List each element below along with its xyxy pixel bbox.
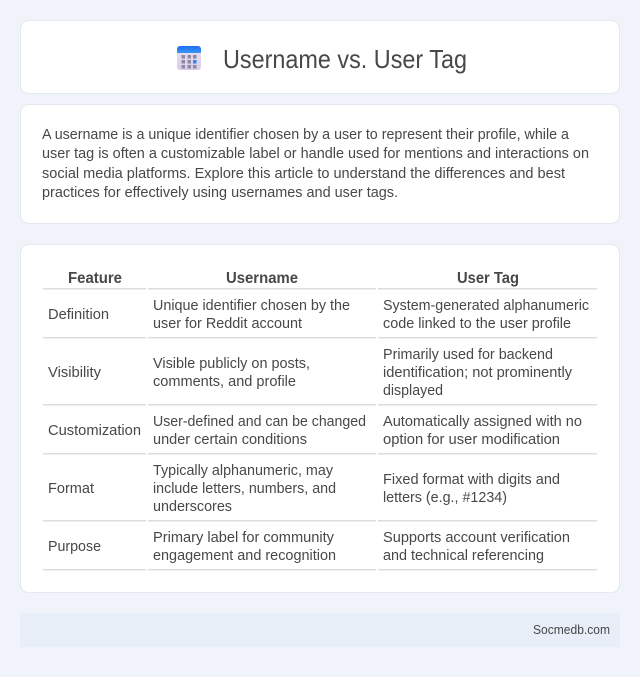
row: visibility: Primarily used for backend	[383, 347, 553, 363]
intro text	[42, 127, 589, 201]
row: purpose: and technical referencing	[383, 548, 544, 564]
row: definition: code linked to the user profile	[383, 316, 571, 332]
row: definition: Unique identifier chosen by the	[153, 298, 350, 314]
row: format: include letters, numbers, and	[153, 481, 336, 497]
table header: Username	[226, 270, 298, 287]
row: customization: Customization	[48, 423, 141, 439]
row: purpose: Primary label for community	[153, 530, 335, 546]
row: visibility	[48, 347, 573, 399]
row: customization: under certain conditions	[153, 432, 307, 448]
row: definition: System-generated alphanumeric	[383, 298, 589, 314]
row: visibility: Visibility	[48, 365, 102, 381]
panel: comparison table	[20, 244, 620, 592]
row: customization: User-defined and can be changed	[153, 414, 366, 430]
table header	[68, 270, 519, 287]
title: Username vs. User Tag	[223, 46, 467, 74]
row: purpose	[48, 530, 570, 564]
row: definition: user for Reddit account	[153, 316, 302, 332]
row: format: Fixed format with digits and	[383, 472, 560, 488]
table header: User Tag	[457, 270, 519, 287]
row: format: letters (e.g., #1234)	[383, 490, 507, 506]
intro text: social media platforms. Explore this article to understand the differences and best	[42, 166, 565, 182]
row: format: Format	[48, 481, 94, 497]
table header: Feature	[68, 270, 122, 287]
row: customization	[48, 414, 582, 448]
row: purpose: engagement and recognition	[153, 548, 336, 564]
row: purpose: Supports account verification	[383, 530, 570, 546]
row: visibility: comments, and profile	[153, 374, 296, 390]
intro text: A username is a unique identifier chosen by a user to represent their profile, while a	[42, 127, 569, 143]
row: visibility: identification; not prominently	[383, 365, 573, 381]
row: visibility: displayed	[383, 383, 443, 399]
row: definition: Definition	[48, 307, 109, 323]
row: customization: option for user modification	[383, 432, 560, 448]
panel: intro	[20, 104, 620, 224]
intro text: practices for effectively using usernames and user tags.	[42, 185, 398, 201]
footer source: Socmedb.com	[533, 622, 610, 637]
table rules	[43, 288, 597, 570]
row: format: underscores	[153, 499, 232, 515]
row: format: Typically alphanumeric, may	[153, 463, 334, 479]
title panel	[20, 20, 620, 94]
intro text: user tag is often a customizable label or handle used for mentions and interactions on	[42, 146, 589, 162]
row: format	[48, 463, 560, 515]
icon: calendar	[177, 46, 201, 70]
row: definition	[48, 298, 589, 332]
row: purpose: Purpose	[48, 539, 101, 555]
row: visibility: Visible publicly on posts,	[153, 356, 310, 372]
row: customization: Automatically assigned with no	[383, 414, 582, 430]
footer bar	[20, 613, 620, 647]
